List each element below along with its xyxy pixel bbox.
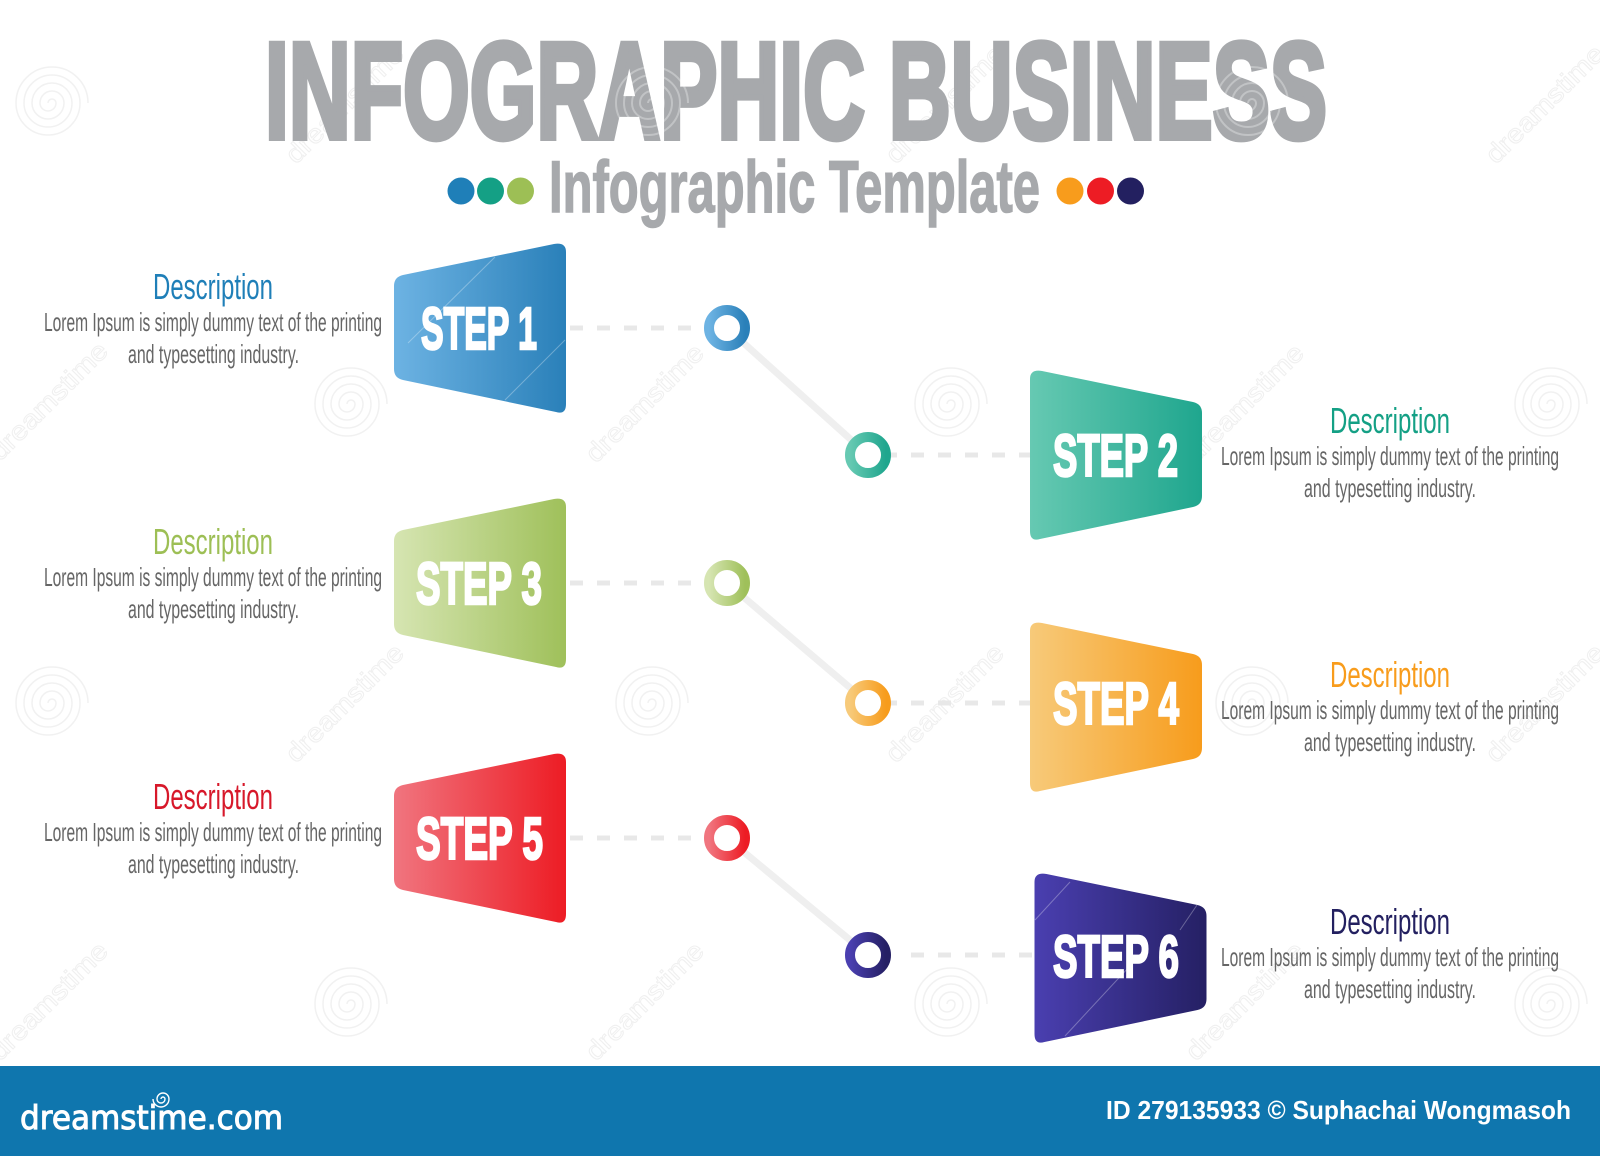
step 5 description: Lorem Ipsum is simply dummy text of the printing	[44, 817, 382, 847]
step 2 shape	[1030, 371, 1202, 540]
connector: step 1 to step 2	[570, 328, 1032, 455]
watermark spirals and text: dreamstime	[279, 38, 410, 169]
step 5 description: Description	[153, 776, 273, 817]
panel: step 5	[44, 754, 745, 923]
step 6 description: Description	[1330, 901, 1450, 942]
step 1 label: STEP 1	[421, 296, 537, 362]
step 2 description	[1221, 400, 1559, 503]
step 6 shape	[1034, 874, 1206, 1043]
step 1 description: and typesetting industry.	[128, 339, 299, 369]
step 3 description: Description	[153, 521, 273, 562]
step 4 description: and typesetting industry.	[1304, 727, 1476, 757]
step 6 description	[1221, 901, 1559, 1004]
step 6 description: and typesetting industry.	[1304, 974, 1476, 1004]
subtitle: Infographic Template	[549, 147, 1040, 228]
connector: step 5 to step 6	[570, 838, 1036, 955]
title watermark overlay	[616, 67, 1288, 135]
panel: step 3	[44, 499, 745, 668]
step 6 node	[850, 937, 886, 973]
step 1 description	[44, 266, 382, 369]
step 2 node	[850, 437, 886, 473]
watermark spirals and text: dreamstime	[579, 337, 710, 468]
footer bar	[0, 1066, 1600, 1156]
step 3 node	[709, 565, 745, 601]
step 1 shape	[394, 244, 566, 413]
step 5 label: STEP 5	[416, 806, 543, 872]
watermark spirals and text: dreamstime	[879, 38, 1010, 169]
logo spiral	[153, 1093, 169, 1107]
step 1 description: Lorem Ipsum is simply dummy text of the printing	[44, 307, 382, 337]
watermark spirals and text: dreamstime	[1479, 637, 1600, 768]
panel: step 2	[850, 371, 1559, 540]
step 2 description: Description	[1330, 400, 1450, 441]
watermark spirals and text: dreamstime	[1479, 38, 1600, 169]
step 4 node	[850, 685, 886, 721]
footer logo: dreamstime.com	[20, 1098, 283, 1137]
step 5 description	[44, 776, 382, 879]
step 4 description: Description	[1330, 654, 1450, 695]
step 6 label: STEP 6	[1053, 924, 1179, 990]
step 1 description: Description	[153, 266, 273, 307]
panel: step 1	[44, 244, 745, 413]
watermark spirals and text: dreamstime	[1179, 935, 1310, 1066]
decorative dots right	[1056, 178, 1144, 204]
step 3 label: STEP 3	[416, 551, 542, 617]
step 2 label: STEP 2	[1053, 423, 1178, 489]
step 5 shape	[394, 754, 566, 923]
panel: step 6	[850, 874, 1559, 1043]
step 4 shape	[1030, 623, 1202, 792]
step 1 node	[709, 310, 745, 346]
panel: step 4	[850, 623, 1559, 792]
step 3 description	[44, 521, 382, 624]
step 3 shape	[394, 499, 566, 668]
step 5 node	[709, 820, 745, 856]
step 4 description	[1221, 654, 1559, 757]
step 2 description: and typesetting industry.	[1304, 473, 1476, 503]
step 3 description: Lorem Ipsum is simply dummy text of the printing	[44, 562, 382, 592]
watermark spirals and text: dreamstime	[879, 637, 1010, 768]
connector: step 3 to step 4	[570, 583, 1032, 703]
footer credit: ID 279135933 © Suphachai Wongmasoh	[1106, 1095, 1571, 1125]
watermark spirals and text: dreamstime	[1179, 337, 1310, 468]
watermark spirals and text: dreamstime	[579, 935, 710, 1066]
step 3 description: and typesetting industry.	[128, 594, 299, 624]
step 4 label: STEP 4	[1053, 671, 1179, 737]
watermark spirals and text: dreamstime	[279, 637, 410, 768]
watermark lines across shapes	[408, 257, 1197, 1036]
decorative dots left	[448, 178, 534, 204]
step 5 description: and typesetting industry.	[128, 849, 299, 879]
